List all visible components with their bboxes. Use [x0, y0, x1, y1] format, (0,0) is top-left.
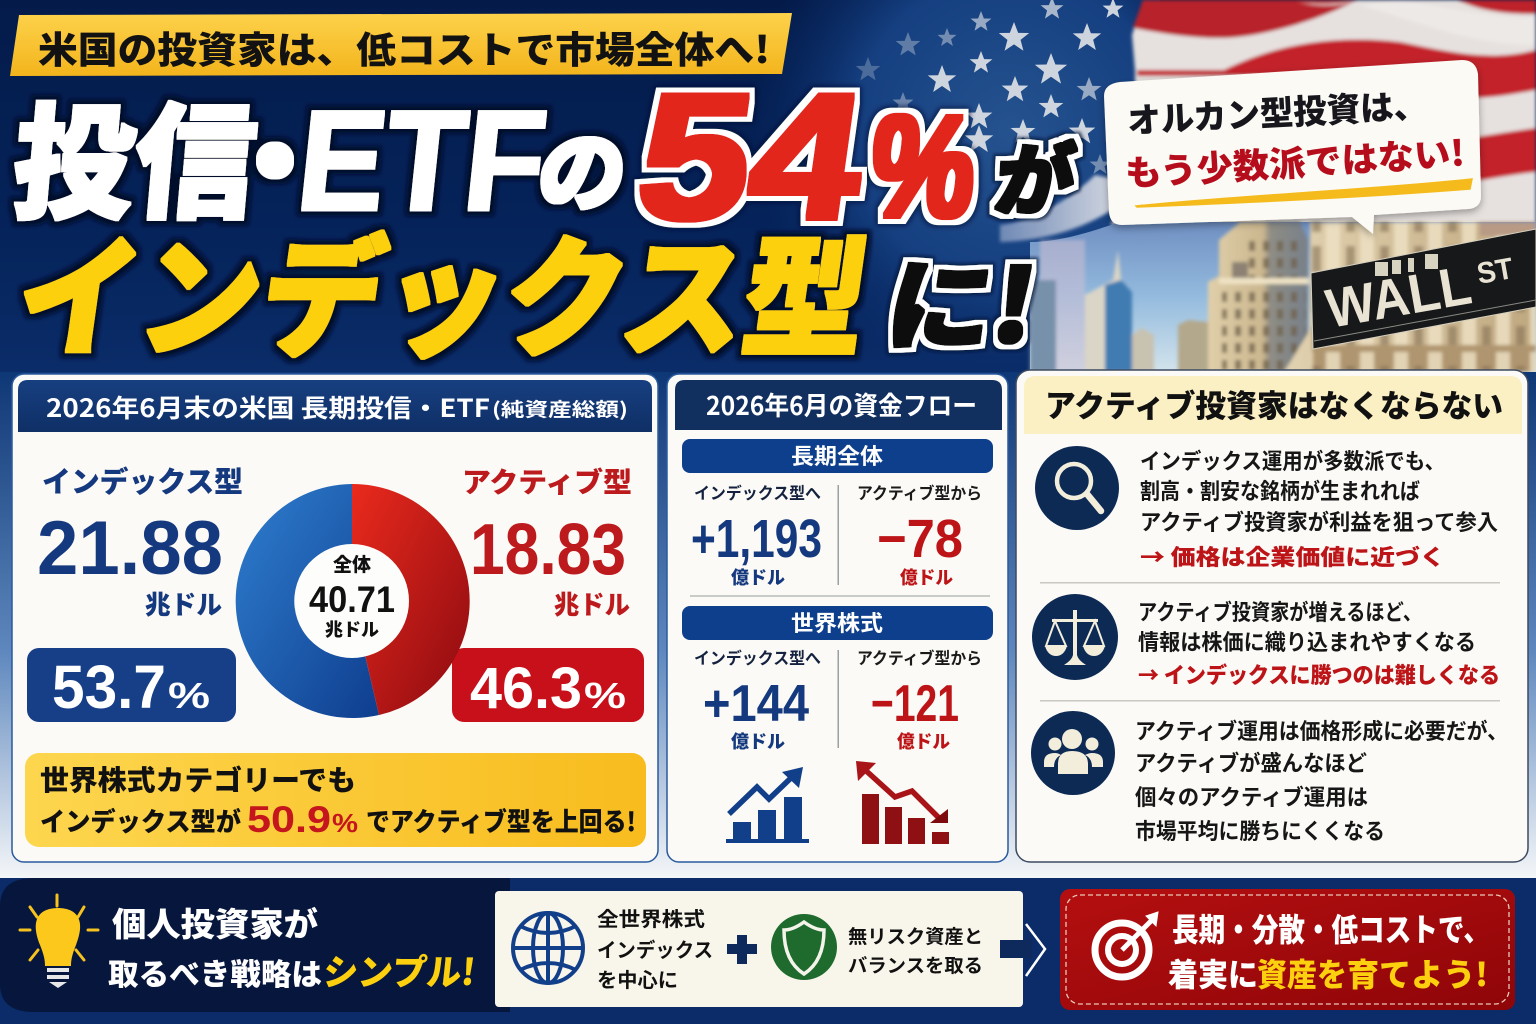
flows heading: 2026年6月の資金フロー: [706, 386, 977, 423]
title ga: が: [989, 117, 1083, 231]
call to action: [1060, 889, 1515, 1010]
active value: 18.83: [470, 510, 626, 590]
icon: target: [1095, 912, 1158, 977]
title line 1: の: [530, 102, 636, 230]
callout: global equity: 50.9: [247, 799, 331, 840]
point 2 text: [1138, 595, 1500, 690]
global equity outflow: [857, 645, 982, 754]
global equity outflow: −121: [871, 675, 959, 733]
bubble headline: オルカン型投資は、: [1126, 78, 1428, 143]
speech bubble: [1104, 60, 1481, 234]
flows heading: [675, 380, 1002, 430]
call to action: 資産を: [1257, 950, 1347, 996]
icon: globe: [513, 913, 583, 983]
callout: global equity: 世界株式カテゴリーでも: [40, 759, 356, 799]
point 1 text: 割高・割安な銘柄が生まれれば: [1140, 474, 1420, 506]
risk-free text: 無リスク資産と: [848, 922, 983, 949]
index unit: 兆ドル: [145, 585, 222, 622]
lower backdrop: [0, 372, 1536, 878]
point 1 text: アクティブ投資家が利益を狙って参入: [1140, 505, 1498, 537]
stars: [856, 0, 1123, 174]
global equity outflow: アクティブ型から: [857, 645, 982, 669]
point 3 text: アクティブが盛んなほど: [1135, 746, 1367, 778]
photo: american flag: [740, 0, 1536, 372]
panel: net assets: [12, 374, 658, 862]
icon: rising chart: [726, 767, 809, 843]
long-term outflow: [857, 480, 982, 590]
street sign: wall st: WALL: [1321, 253, 1476, 340]
global index text: を中心に: [597, 964, 678, 993]
risk-free text: [848, 922, 983, 978]
title line 1: 投信: [7, 64, 265, 245]
title 54 percent: [627, 57, 984, 256]
icon: plus: [727, 935, 757, 964]
active panel heading: アクティブ投資家はなくならない: [1045, 381, 1503, 426]
panel heading: [18, 380, 652, 432]
bubble highlight: もう少数派ではない!: [1124, 125, 1466, 197]
strategy box: [495, 891, 1023, 1007]
active label: アクティブ型: [462, 461, 632, 501]
title line 1: ・: [212, 63, 338, 244]
icon: arrow: [1000, 924, 1045, 976]
callout: global equity: でアクティブ型を上回る!: [366, 802, 636, 839]
street sign: wall st: ST: [1474, 252, 1516, 291]
callout: global equity: インデックス型が: [40, 802, 241, 839]
title line 1: [7, 63, 636, 245]
donut chart: 全体: [333, 550, 371, 577]
icon: magnifier: [1035, 446, 1119, 530]
callout: global equity: %: [332, 808, 358, 838]
global equity outflow: 億ドル: [897, 728, 950, 754]
panel heading: 2026年6月末の米国 長期投信・ETF: [46, 389, 490, 425]
kicker banner: 米国の投資家は、低コストで市場全体へ!: [38, 20, 770, 74]
long-term inflow: [691, 480, 822, 590]
title 54 percent: 54: [627, 57, 877, 256]
point 1 text: [1140, 444, 1498, 572]
long-term inflow: 億ドル: [731, 564, 785, 590]
index share pill: %: [168, 675, 210, 716]
global index text: [597, 903, 713, 993]
title ni: に!: [877, 226, 1048, 371]
title line 2: インデックス型: [7, 194, 881, 383]
long-term section bar: 長期全体: [791, 439, 883, 471]
point 1 text: インデックス運用が多数派でも、: [1140, 444, 1445, 476]
global equity inflow: インデックス型へ: [694, 645, 821, 669]
donut chart: [236, 484, 470, 718]
call to action: 着実に: [1168, 950, 1258, 996]
point 2 text: アクティブ投資家が増えるほど、: [1138, 595, 1422, 627]
call to action: 育てよう!: [1347, 950, 1488, 996]
long-term outflow: 億ドル: [900, 564, 953, 590]
donut chart: 40.71: [309, 579, 395, 620]
active unit: 兆ドル: [554, 585, 630, 622]
index share pill: 53.7: [52, 653, 166, 721]
strategy text: シンプル!: [321, 944, 478, 996]
point 1 text: → 価格は企業価値に近づく: [1140, 540, 1445, 572]
donut chart: 兆ドル: [325, 616, 379, 642]
page background: [0, 0, 1536, 372]
global equity section bar: [682, 606, 993, 640]
global index text: 全世界株式: [597, 903, 705, 932]
active share pill: [452, 648, 644, 722]
point 2 text: 情報は株価に織り込まれやすくなる: [1138, 625, 1476, 657]
point 3 text: [1135, 714, 1508, 846]
long-term section bar: [682, 439, 993, 473]
global equity inflow: [694, 645, 821, 754]
panel: active investors: [1016, 370, 1528, 862]
global equity inflow: 億ドル: [731, 728, 785, 754]
icon: scales: [1032, 594, 1118, 680]
index value: 21.88: [37, 506, 223, 591]
icon: shield: [771, 914, 837, 980]
point 2 text: → インデックスに勝つのは難しくなる: [1138, 658, 1500, 690]
long-term outflow: −78: [877, 509, 963, 569]
global equity inflow: +144: [703, 675, 809, 733]
long-term outflow: アクティブ型から: [857, 480, 982, 504]
title line 1: ETF: [291, 81, 554, 241]
long-term inflow: インデックス型へ: [694, 480, 821, 504]
panel heading: (純資産総額): [492, 395, 628, 422]
icon: light bulb: [20, 895, 98, 988]
strategy text: 取るべき戦略は: [108, 950, 322, 994]
global equity section bar: 世界株式: [791, 606, 883, 638]
icon: people: [1031, 711, 1115, 795]
street sign: wall st: [1311, 229, 1536, 349]
long-term inflow: +1,193: [691, 509, 822, 569]
photo: wall street buildings: [1030, 222, 1536, 372]
index label: インデックス型: [42, 459, 243, 501]
icon: falling chart: [856, 761, 949, 844]
point 3 text: 個々のアクティブ運用は: [1135, 780, 1368, 812]
risk-free text: バランスを取る: [848, 951, 983, 978]
global index text: インデックス: [597, 934, 713, 963]
title 54 percent: %: [863, 85, 984, 247]
point 3 text: 市場平均に勝ちにくくなる: [1135, 814, 1385, 846]
panel: fund flows: [667, 374, 1008, 862]
bottom banner: [0, 878, 1536, 1024]
active share pill: 46.3: [470, 656, 582, 721]
strategy text: 個人投資家が: [112, 898, 318, 946]
index share pill: [27, 648, 236, 722]
point 3 text: アクティブ運用は価格形成に必要だが、: [1135, 714, 1508, 746]
active share pill: %: [584, 675, 626, 716]
callout: global equity: [25, 753, 646, 847]
strategy text: [108, 898, 478, 996]
